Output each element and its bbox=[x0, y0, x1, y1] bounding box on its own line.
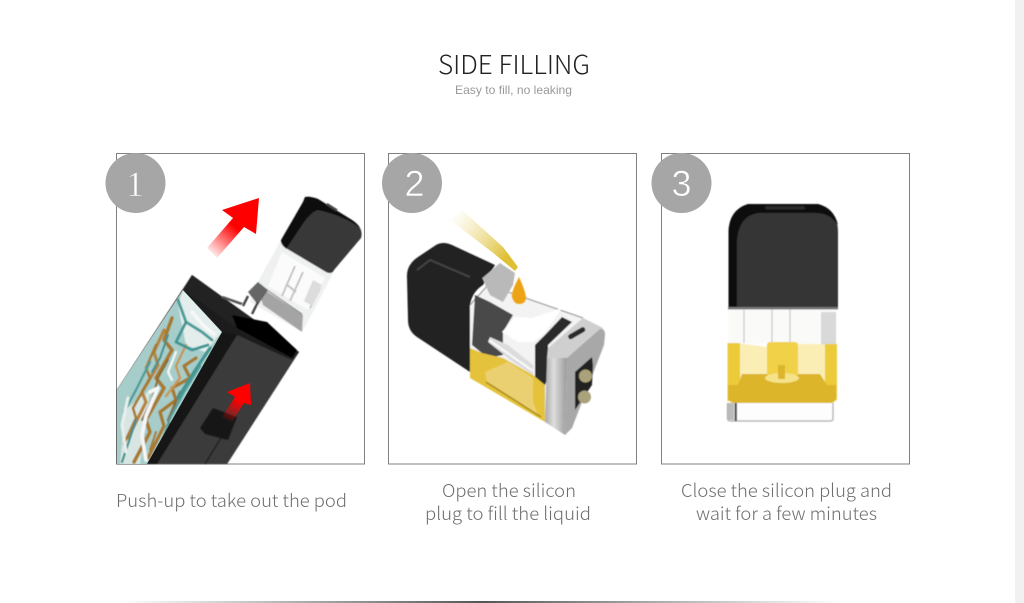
caption: step 1: Push-up to take out the pod bbox=[116, 487, 347, 513]
panel: step 1 bbox=[106, 153, 364, 470]
device body bbox=[117, 275, 299, 464]
panel: step 2 bbox=[382, 153, 636, 464]
caption: step 3: Close the silicon plug and bbox=[681, 477, 892, 503]
panel frame bbox=[388, 154, 636, 464]
step badge 1: 1 bbox=[126, 164, 144, 204]
black cap bbox=[728, 204, 838, 308]
liquid bbox=[470, 348, 545, 422]
liquid drop bbox=[512, 277, 526, 304]
pod on its side bbox=[407, 243, 605, 435]
clear tank bbox=[470, 285, 583, 422]
big red arrow bbox=[207, 198, 259, 258]
caption: step 3 bbox=[681, 477, 892, 526]
closed pod bbox=[728, 204, 838, 421]
silicone plug bbox=[482, 263, 515, 302]
page side strip bbox=[1015, 0, 1024, 603]
metal end bbox=[545, 358, 567, 435]
inner post bbox=[767, 342, 798, 376]
caption: step 2: plug to fill the liquid bbox=[425, 500, 591, 526]
liquid bbox=[728, 343, 837, 403]
panel: step 3 bbox=[652, 153, 910, 464]
step badge 3 bbox=[652, 153, 712, 213]
caption: step 2: Open the silicon bbox=[442, 477, 576, 503]
pod removed from device bbox=[243, 197, 362, 332]
step badge 3: 3 bbox=[671, 163, 692, 204]
small red arrow bbox=[222, 383, 251, 422]
step badge 1 bbox=[106, 153, 166, 213]
lower clear base bbox=[728, 403, 833, 421]
black cap bbox=[407, 243, 495, 372]
heading: SIDE FILLING bbox=[438, 45, 590, 82]
panel frame bbox=[662, 154, 910, 464]
clear tank bbox=[728, 308, 837, 344]
slider button bbox=[200, 408, 237, 440]
marble panel bbox=[117, 290, 222, 464]
step badge 2: 2 bbox=[404, 163, 425, 204]
title block bbox=[438, 45, 590, 97]
caption: step 3: wait for a few minutes bbox=[696, 500, 877, 526]
bottom shadow line bbox=[118, 601, 844, 603]
liquid base bbox=[728, 374, 836, 403]
caption: step 2 bbox=[425, 477, 591, 526]
drip nozzle bbox=[450, 210, 518, 271]
panel frame bbox=[116, 154, 364, 464]
subheading: Easy to fill, no leaking bbox=[455, 83, 572, 97]
step badge 2 bbox=[382, 153, 442, 213]
